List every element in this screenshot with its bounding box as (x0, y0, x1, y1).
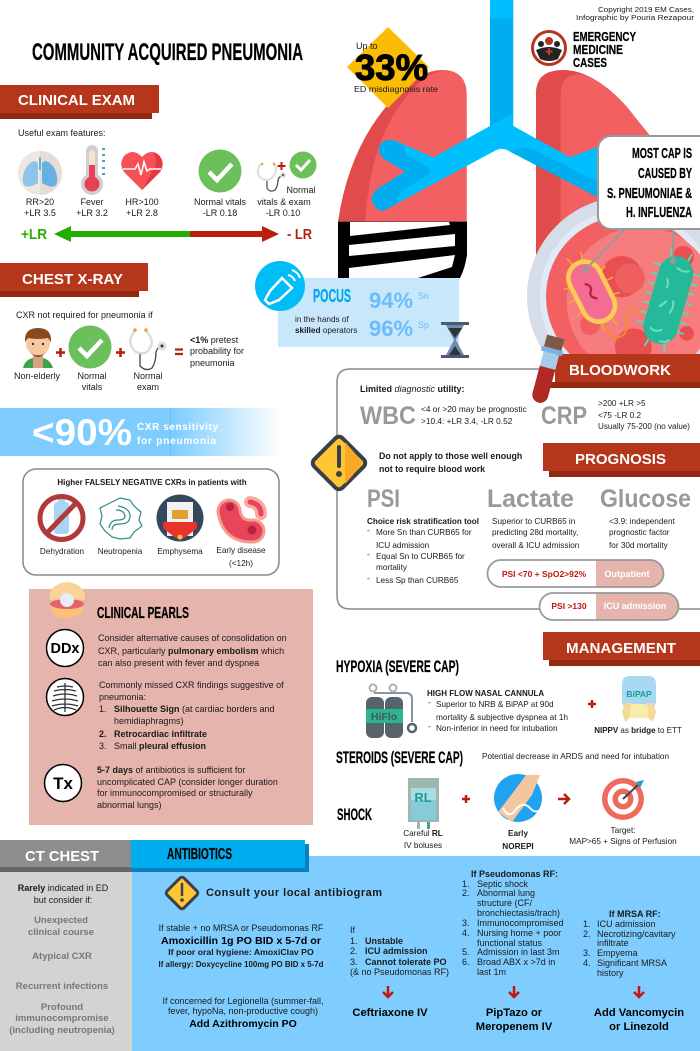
icon: normal vitals check (68, 326, 112, 368)
text: MRSA risk factors: Empyema (597, 948, 638, 958)
Glucose: <3.9: independent (609, 517, 676, 526)
title: COMMUNITY ACQUIRED PNEUMONIA (32, 39, 303, 66)
panel: POCUS: 96% (369, 316, 413, 341)
CRP: CRP (541, 402, 587, 430)
icon: oxygen tanks HiFlo (366, 684, 416, 738)
panel: POCUS (255, 261, 469, 358)
icon: neutropenia (100, 498, 142, 539)
panel: bloodwork and prognosis (337, 369, 700, 620)
text: high flow nasal cannula: HIGH FLOW NASAL CANNULA (427, 689, 544, 698)
PSI: ICU admission (376, 541, 430, 550)
text: pseudomonas risk factors: 1. (462, 879, 470, 889)
text: MRSA risk factors: If MRSA RF: (609, 909, 661, 919)
labels: (<12h) (229, 559, 253, 568)
icon: young man (23, 328, 53, 368)
text: ceftriaxone criteria: Unstable (365, 936, 403, 946)
panel: CT chest: but consider if: (34, 895, 92, 905)
text: legionella (162, 996, 324, 1030)
text: pseudomonas risk factors: bronchiectasis/trach) (477, 908, 560, 918)
panel: clinical pearls (29, 582, 313, 825)
icon: arm with IV (494, 774, 542, 822)
text: pseudomonas risk factors: 2. (462, 888, 470, 898)
text: MRSA risk factors: history (597, 968, 624, 978)
icon: oxygen tanks HiFlo: HiFlo (371, 711, 397, 723)
Lactate: Superior to CURB65 in (492, 517, 576, 526)
text: missed CXR findings (99, 680, 284, 751)
pill: ICU admission: PSI >130 (551, 601, 587, 611)
magnifying glass with bacteria (527, 201, 700, 354)
labels: Early disease (216, 546, 266, 555)
icon: hourglass (441, 322, 469, 358)
text: piptazo or meropenem: Meropenem IV (476, 1021, 553, 1033)
icon: BiPAP mask (622, 676, 656, 722)
right lung (536, 70, 700, 333)
text: outpatient regimen (159, 923, 324, 969)
Glucose (600, 485, 691, 550)
arrow: likelihood ratio scale (21, 226, 312, 243)
banner: antibiotics: ANTIBIOTICS (167, 846, 232, 863)
text: pseudomonas risk factors: Septic shock (477, 879, 529, 889)
text: treatment duration: 5-7 days of antibiotics is sufficient for (97, 765, 245, 775)
lungs illustration (338, 0, 700, 354)
text: pretest probability: probability for (190, 346, 244, 356)
text: pseudomonas risk factors: Abnormal lung (477, 888, 535, 898)
labels: rule-out criteria (14, 371, 163, 392)
text: MRSA risk factors: ICU admission (597, 919, 656, 929)
arrow (558, 794, 569, 804)
panel: POCUS: in the hands of (295, 315, 349, 324)
equals sign (175, 350, 183, 354)
misdiagnosis callout: ED misdiagnosis rate (354, 84, 438, 94)
banner: clinical exam (0, 85, 159, 119)
icon: normal vitals check (198, 150, 242, 192)
exam feature labels: +LR 3.2 (76, 208, 108, 218)
text: limited utility: Limited diagnostic utility: (360, 384, 465, 394)
heading: steroids: STEROIDS (SEVERE CAP) (336, 748, 463, 767)
text: differential (98, 633, 287, 668)
logo: Emergency Medicine Cases: EMERGENCY (573, 29, 636, 44)
labels: Emphysema (157, 547, 203, 556)
labels: rule-out criteria: exam (137, 382, 159, 392)
PSI: PSI (367, 485, 400, 513)
text: outpatient regimen: If poor oral hygiene: AmoxiClav PO (168, 947, 314, 957)
panel: CT chest: CT CHEST (25, 848, 99, 865)
text: differential: can also present with fever and dyspnea (98, 658, 259, 668)
text: vancomycin or linezolid: Add Vancomycin (594, 1007, 684, 1019)
text: MRSA risk factors: infiltrate (597, 938, 629, 948)
text: MRSA risk factors: Significant MRSA (597, 958, 667, 968)
text: MRSA risk factors: 3. (583, 948, 591, 958)
text: NIPPV: NIPPV as bridge to ETT (594, 726, 682, 735)
panel: POCUS: Sn (418, 291, 429, 301)
heading: hypoxia: HYPOXIA (SEVERE CAP) (336, 657, 459, 676)
icon: DDx (46, 630, 84, 666)
pill: ICU admission: ICU admission (604, 601, 666, 611)
label: target: Target: (610, 826, 636, 835)
text: pseudomonas risk factors (462, 869, 564, 977)
bacterium: S. pneumoniae (563, 251, 620, 332)
text: high flow nasal cannula: mortality & subjective dyspnea at 1h (436, 713, 568, 722)
plus (462, 795, 470, 803)
CRP (541, 399, 690, 431)
panel: CT chest: Profound (41, 1002, 83, 1013)
pill: outpatient (488, 560, 664, 587)
icon: Tx: Tx (53, 774, 73, 793)
exam feature labels (24, 185, 316, 218)
CRP: <75 -LR 0.2 (598, 411, 641, 420)
text: high flow nasal cannula: Non-inferior in need for intubation (436, 724, 558, 733)
plus (588, 700, 596, 708)
text: treatment duration: for immunocompromised or structurally (97, 788, 253, 798)
text: missed CXR findings: pneumonia: (99, 692, 146, 702)
PSI: - (367, 526, 370, 535)
label: careful RL: Careful RL (403, 829, 443, 838)
text: warning (379, 451, 522, 474)
text: MRSA risk factors: 1. (583, 919, 591, 929)
Lactate: Lactate (487, 485, 574, 513)
PSI: mortality (376, 563, 408, 572)
icon: stethoscope and check (258, 152, 316, 191)
panel: falsely negative CXRs (23, 469, 279, 575)
text: pseudomonas risk factors: Admission in last 3m (477, 947, 560, 957)
icon: early disease bacteria (226, 502, 261, 534)
text: treatment duration: uncomplicated CAP (consider longer duration (97, 777, 278, 787)
text: MRSA risk factors: 2. (583, 929, 591, 939)
icon: emphysema (156, 494, 204, 542)
text: pseudomonas risk factors: last 1m (477, 967, 506, 977)
label: careful RL (403, 829, 443, 850)
logo: Emergency Medicine Cases: CASES (573, 55, 607, 70)
plus (116, 348, 125, 357)
banner: clinical exam: CLINICAL EXAM (18, 92, 135, 109)
text: pseudomonas risk factors: 4. (462, 928, 470, 938)
icon: Tx (44, 764, 82, 802)
banner: management (543, 632, 700, 666)
text: pseudomonas risk factors: 5. (462, 947, 470, 957)
stat band: CXR sensitivity: <90% (32, 412, 132, 453)
banner: prognosis: PROGNOSIS (575, 451, 666, 468)
text: pseudomonas risk factors: 3. (462, 918, 470, 928)
airways (372, 0, 607, 211)
label: careful RL: IV boluses (404, 841, 442, 850)
icon: lungs (18, 151, 62, 195)
arrow down (383, 986, 393, 997)
logo: Emergency Medicine Cases: MEDICINE (573, 42, 623, 57)
exam feature labels: RR>20 (26, 197, 54, 207)
text: treatment duration (97, 765, 278, 810)
plus (56, 348, 65, 357)
panel: CT chest: Rarely indicated in ED (18, 883, 109, 893)
Glucose: for 30d mortality (609, 541, 669, 550)
text: pseudomonas risk factors: If Pseudomonas RF: (471, 869, 558, 879)
WBC (360, 402, 527, 430)
heading: consult antibiogram: Consult your local antibiogram (206, 887, 382, 899)
text: pseudomonas risk factors: structure (CF/ (477, 898, 533, 908)
icon: stethoscope (130, 328, 166, 370)
PSI: - (367, 574, 370, 583)
text: missed CXR findings: Silhouette Sign (at cardiac borders and (114, 704, 275, 714)
icon: DDx: DDx (50, 641, 80, 657)
PSI (367, 485, 479, 585)
text: warning: Do not apply to those well enough (379, 451, 522, 461)
labels: rule-out criteria: Normal (133, 371, 163, 381)
exam feature labels: Fever (80, 197, 104, 207)
text: missed CXR findings: Small pleural effusion (114, 741, 206, 751)
PSI: - (367, 550, 370, 559)
icon: warning sign (165, 876, 199, 910)
misdiagnosis callout (347, 27, 438, 108)
arrow: likelihood ratio scale: - LR (287, 227, 312, 243)
text: missed CXR findings: Commonly missed CXR findings suggestive of (99, 680, 284, 690)
text: MRSA risk factors: Necrotizing/cavitary (597, 929, 676, 939)
text: legionella: Add Azithromycin PO (189, 1018, 297, 1030)
label: early norepi (502, 829, 534, 851)
text: high flow nasal cannula (427, 689, 568, 733)
pill: outpatient: PSI <70 + SpO2>92% (502, 569, 587, 579)
bacterium: H. influenza (637, 248, 700, 352)
arrow down (634, 986, 644, 997)
arrow down (509, 986, 519, 997)
text: ceftriaxone criteria: 1. (350, 936, 358, 946)
text: pretest probability: <1% pretest (190, 335, 239, 345)
label: early norepi: NOREPI (502, 842, 534, 851)
misdiagnosis callout: Up to (356, 41, 378, 51)
panel: CT chest: Atypical CXR (32, 951, 92, 962)
text: vancomycin or linezolid (594, 1007, 684, 1033)
Glucose: prognostic factor (609, 528, 670, 537)
text: outpatient regimen: If stable + no MRSA or Pseudomonas RF (159, 923, 324, 933)
stat band: CXR sensitivity: for pneumonia (137, 436, 216, 447)
CRP: >200 +LR >5 (598, 399, 646, 408)
rib cage (338, 222, 467, 278)
icon: RL IV bag: RL (414, 790, 432, 805)
text: treatment duration: abnormal lungs) (97, 800, 162, 810)
text: pseudomonas risk factors: Nursing home + poor (477, 928, 561, 938)
panel: CT chest: clinical course (28, 927, 94, 938)
banner: management: MANAGEMENT (566, 640, 676, 657)
CRP: Usually 75-200 (no value) (598, 422, 690, 431)
text: piptazo or meropenem: PipTazo or (486, 1007, 543, 1019)
exam feature labels: +LR 3.5 (24, 208, 56, 218)
text: piptazo or meropenem (476, 1007, 553, 1033)
banner: chest x-ray: CHEST X-RAY (22, 271, 123, 288)
exam feature labels: Normal vitals (194, 197, 247, 207)
heading: Higher FALSELY NEGATIVE CXRs in patients with (57, 478, 247, 487)
icon: BiPAP mask: BiPAP (626, 689, 652, 699)
text: ceftriaxone criteria: Cannot tolerate PO (365, 957, 447, 967)
text: ceftriaxone criteria: (& no Pseudomonas RF) (350, 967, 449, 977)
label: target: MAP>65 + Signs of Perfusion (569, 837, 677, 846)
WBC: WBC (360, 402, 416, 430)
text: ceftriaxone criteria: ICU admission (365, 946, 428, 956)
text: missed CXR findings: Retrocardiac infiltrate (114, 729, 207, 739)
text: ceftriaxone criteria (350, 925, 449, 977)
banner: prognosis (543, 443, 700, 477)
icon: warning sign (311, 435, 367, 491)
PSI: Less Sp than CURB65 (376, 576, 459, 585)
icon: ultrasound probe (255, 261, 305, 311)
stat band: CXR sensitivity: CXR sensitivity (137, 422, 218, 433)
panel: POCUS: POCUS (313, 286, 351, 306)
pill: ICU admission (540, 593, 678, 620)
text: CXR not required: CXR not required for pneumonia if (16, 310, 153, 320)
Lactate: predicting 28d mortality, (492, 528, 578, 537)
text: pretest probability (190, 335, 244, 368)
labels: Dehydration (40, 547, 85, 556)
panel: CT chest: Recurrent infections (16, 981, 108, 992)
PSI: Equal Sn to CURB65 for (376, 552, 465, 561)
text: missed CXR findings: 2. (99, 729, 107, 739)
panel: POCUS: 94% (369, 288, 413, 313)
text: missed CXR findings: 1. (99, 704, 107, 714)
text: outpatient regimen: If allergy: Doxycycline 100mg PO BID x 5-7d (159, 960, 324, 969)
copyright note (576, 5, 695, 22)
Lactate: overall & ICU admission (492, 541, 580, 550)
PSI: More Sn than CURB65 for (376, 528, 472, 537)
copyright note: Copyright 2019 EM Cases, (598, 5, 694, 14)
icon: RL IV bag (408, 778, 439, 829)
exam feature labels: +LR 2.8 (126, 208, 158, 218)
text: pseudomonas risk factors: Broad ABX x >7d in (477, 957, 555, 967)
text: ceftriaxone criteria: 2. (350, 946, 358, 956)
text: useful exam features: Useful exam features: (18, 128, 106, 138)
text: differential: CXR, particularly pulmonary embolism which (98, 646, 284, 656)
text: MRSA risk factors: 4. (583, 958, 591, 968)
text: ceftriaxone: Ceftriaxone IV (352, 1007, 428, 1019)
exam feature labels: Normal (286, 185, 316, 195)
exam feature labels: -LR 0.10 (266, 208, 300, 218)
labels: Neutropenia (98, 547, 143, 556)
text: missed CXR findings: 3. (99, 741, 107, 751)
panel: CT chest: (including neutropenia) (9, 1025, 115, 1036)
labels: rule-out criteria: vitals (82, 382, 103, 392)
text: high flow nasal cannula: - (428, 698, 431, 707)
labels: rule-out criteria: Non-elderly (14, 371, 61, 381)
panel: CT chest: immunocompromise (15, 1013, 109, 1024)
text: pseudomonas risk factors: 6. (462, 957, 470, 967)
exam feature labels: HR>100 (125, 197, 159, 207)
Glucose: Glucose (600, 485, 691, 513)
text: pseudomonas risk factors: Immunocompromised (477, 918, 564, 928)
banner: chest x-ray (0, 263, 148, 297)
panel: POCUS: Sp (418, 320, 429, 330)
heading: CLINICAL PEARLS (97, 605, 189, 622)
arrow: likelihood ratio scale: +LR (21, 227, 47, 243)
panel: POCUS: skilled operators (295, 326, 357, 335)
text: steroids benefit: Potential decrease in ARDS and need for intubation (482, 752, 669, 761)
text: ceftriaxone criteria: 3. (350, 957, 358, 967)
text: differential: Consider alternative causes of consolidation on (98, 633, 287, 643)
text: ceftriaxone criteria: If (350, 925, 356, 935)
exam feature labels: vitals & exam (257, 197, 311, 207)
text: legionella: fever, hypoNa, non-productive cough) (168, 1006, 318, 1016)
icon: dehydration (40, 496, 83, 540)
pill: outpatient: Outpatient (604, 569, 650, 579)
text: vancomycin or linezolid: or Linezold (609, 1021, 669, 1033)
banner: antibiotics (131, 840, 309, 872)
label: target (569, 826, 677, 846)
icon: blood tube (528, 334, 566, 405)
banner: bloodwork: BLOODWORK (569, 362, 671, 379)
WBC: <4 or >20 may be prognostic (421, 404, 527, 414)
logo: Emergency Medicine Cases (532, 29, 636, 70)
heading: shock: SHOCK (337, 805, 372, 824)
PSI: Choice risk stratification tool (367, 517, 479, 526)
Lactate (487, 485, 580, 550)
panel: CT chest: Unexpected (34, 915, 88, 926)
text: high flow nasal cannula: Superior to NRB & BiPAP at 90d (436, 700, 554, 709)
icon: rib cage (46, 678, 84, 716)
text: missed CXR findings: hemidiaphragms) (114, 716, 184, 726)
copyright note: Infographic by Pouria Rezapour (576, 13, 695, 22)
text: pseudomonas risk factors: functional status (477, 938, 543, 948)
banner: bloodwork (550, 354, 700, 388)
panel: CT chest (0, 840, 132, 1051)
misdiagnosis callout: 33% (355, 47, 428, 88)
label: early norepi: Early (508, 829, 528, 838)
left lung (338, 70, 467, 222)
text: pretest probability: pneumonia (190, 358, 235, 368)
callout: most CAP causes (582, 136, 700, 273)
text: legionella: If concerned for Legionella (summer-fall, (162, 996, 324, 1006)
panel: antibiotics background (132, 856, 700, 1051)
text: outpatient regimen: Amoxicillin 1g PO BID x 5-7d or (161, 935, 321, 947)
icon: target (602, 778, 644, 820)
labels: rule-out criteria: Normal (77, 371, 107, 381)
text: high flow nasal cannula: - (428, 722, 431, 731)
icon: heart (121, 152, 163, 190)
icon: thermometer (81, 145, 105, 195)
text: warning: not to require blood work (379, 464, 485, 474)
exam feature labels: -LR 0.18 (203, 208, 237, 218)
WBC: >10.4: +LR 3.4, -LR 0.52 (421, 416, 513, 426)
stat band: CXR sensitivity (0, 408, 281, 456)
icon: pearl shell (50, 582, 85, 618)
text: MRSA risk factors (583, 909, 676, 978)
labels (40, 546, 266, 568)
